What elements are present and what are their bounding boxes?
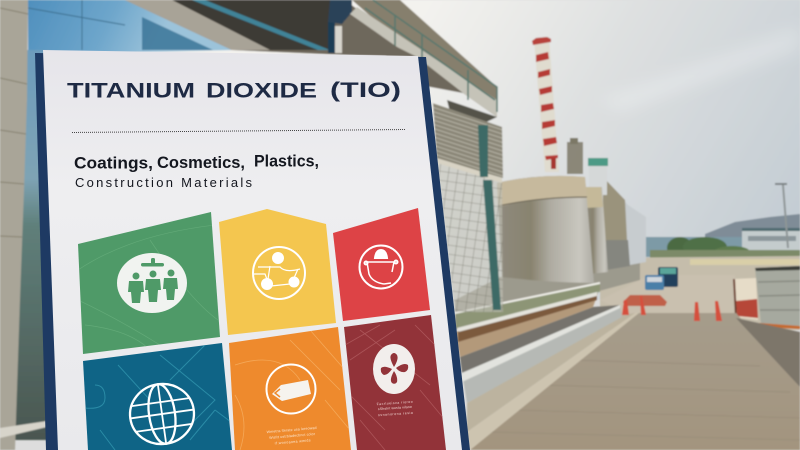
- asphalt strip: [460, 305, 620, 373]
- distant buildings and trees: [646, 228, 800, 260]
- tile: red, helmet: [333, 208, 430, 321]
- sign face: [43, 50, 462, 450]
- icon: tag: [266, 364, 316, 414]
- lamp post: [775, 183, 789, 248]
- tile caption: Wmetns fterate usa lereowad: [266, 426, 317, 434]
- industries list: Plastics,: [254, 152, 319, 170]
- building soffit: [125, 0, 420, 57]
- fence: [455, 282, 600, 342]
- under-balcony shadow: [447, 100, 497, 125]
- tile caption: sSholnt wusta vilane: [378, 405, 412, 411]
- stone column: [0, 0, 28, 450]
- small scaffold tower: [567, 138, 583, 174]
- title: (TIO): [330, 79, 401, 102]
- far road with vehicles: [600, 267, 735, 315]
- title: TITANIUM: [67, 80, 195, 102]
- reflected steel frame: [142, 17, 213, 50]
- tile caption: nsnonorona resia: [378, 411, 413, 417]
- main silo: [497, 176, 594, 283]
- rear silo: [585, 187, 608, 274]
- upper balcony beam: [343, 0, 497, 117]
- tile caption: [266, 426, 318, 446]
- site notice board: [733, 278, 758, 320]
- glass facade: [28, 0, 232, 55]
- tile: green, people: [78, 212, 220, 354]
- pavement curb: [467, 313, 639, 450]
- icon: people: [117, 253, 187, 313]
- tile: blue, globe: [83, 343, 235, 450]
- industries list: Cosmetics,: [157, 154, 245, 172]
- traffic cones: [622, 296, 722, 321]
- sign board: [35, 50, 470, 450]
- tile caption: rf.wonoaoea wmids: [275, 438, 311, 446]
- distant hill: [705, 214, 800, 250]
- industries list: [74, 152, 319, 190]
- concrete pavement: [470, 313, 800, 450]
- title: DIOXIDE: [206, 80, 317, 102]
- icon: globe: [126, 380, 198, 448]
- industries list: Coatings,: [74, 154, 153, 172]
- metal container: [755, 266, 800, 329]
- industries list: Construction Materials: [75, 175, 252, 190]
- icon: fan: [373, 344, 415, 394]
- foreground handrail: [0, 421, 47, 438]
- icon: helmet and bowl: [360, 246, 402, 288]
- steel columns: [478, 125, 501, 310]
- sky: [0, 0, 800, 300]
- chimney: [532, 37, 559, 172]
- tile: maroon, fan: [344, 315, 446, 450]
- scaffolding: [433, 103, 503, 312]
- tile caption: Facrlueisva rioroo: [376, 400, 413, 406]
- ground behind fence: [455, 262, 640, 330]
- icon: connected nodes: [253, 247, 305, 299]
- tile caption: Wisfrt ustrbladecbnct color: [269, 432, 316, 440]
- distant ground: [600, 256, 800, 330]
- title: [67, 79, 401, 102]
- white concrete barrier: [462, 305, 622, 403]
- sign navy edge: [35, 53, 470, 450]
- tile: yellow, network: [219, 209, 336, 335]
- factory block: [588, 158, 646, 270]
- tile caption: [376, 400, 414, 417]
- balcony railing: [365, 0, 497, 112]
- tile: orange, tag: [229, 327, 351, 450]
- sandy verge: [455, 293, 598, 357]
